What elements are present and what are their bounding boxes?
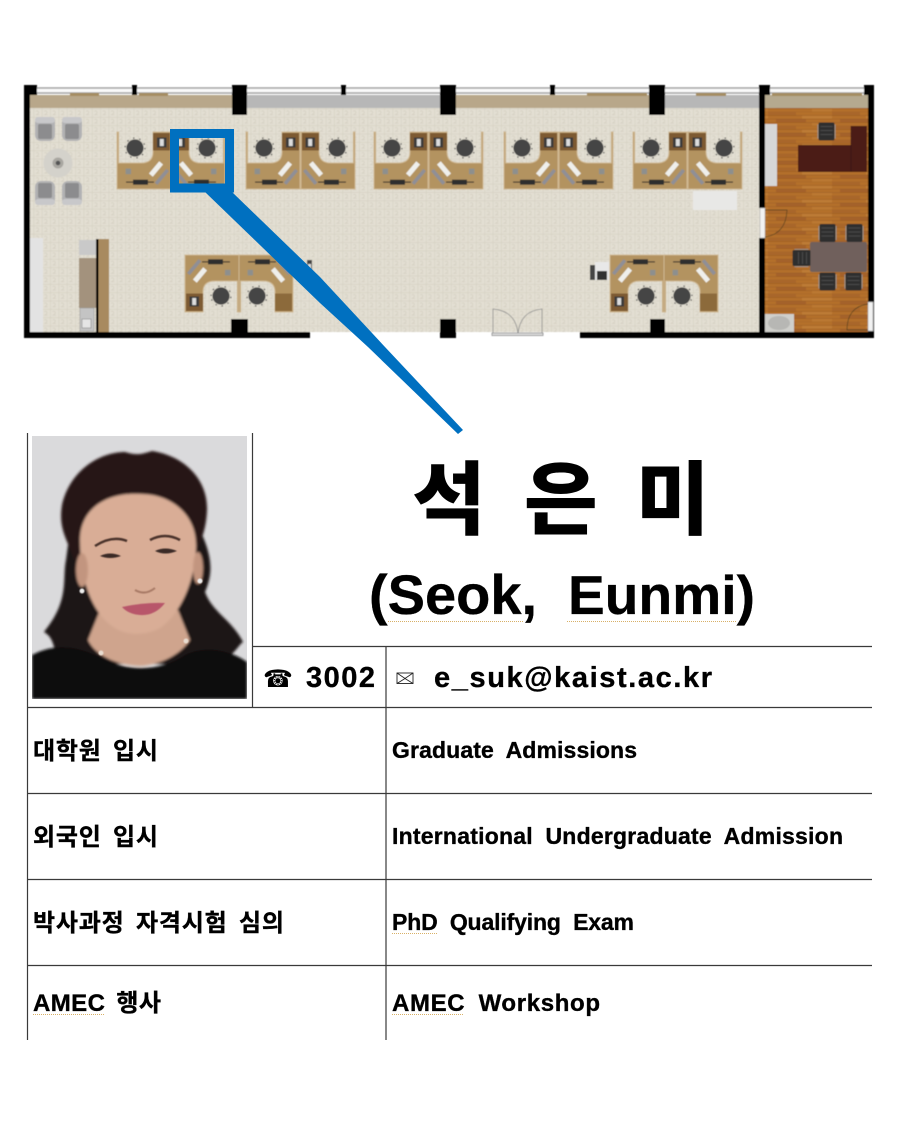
phone number: ☎ <box>263 665 293 693</box>
printer left <box>297 260 312 274</box>
workstation cluster 1 <box>117 132 225 189</box>
blue pointer arrow <box>205 192 463 434</box>
name in Korean: 은 <box>524 456 598 545</box>
window rail <box>30 88 870 93</box>
office furniture <box>765 122 867 332</box>
icon: envelope <box>397 673 413 684</box>
row: PhD qualifying exam <box>33 909 634 937</box>
row: AMEC workshop: AMEC Workshop <box>392 990 600 1017</box>
face <box>80 494 196 634</box>
office wood floor <box>765 108 869 332</box>
row: PhD qualifying exam: 박사과정 자격시험 심의 <box>33 910 284 937</box>
top <box>32 647 247 699</box>
office door frame <box>760 208 765 238</box>
workstation cluster 3 <box>374 132 483 189</box>
workstation cluster 2 <box>246 132 355 189</box>
lower workstation cluster right <box>610 255 718 312</box>
name in Korean: 미 <box>636 456 710 545</box>
name in English: (Seok, <box>369 563 537 626</box>
name in English <box>369 563 755 626</box>
entrance double door <box>492 309 543 336</box>
workstation cluster 5 <box>633 132 742 189</box>
printer right <box>590 262 609 280</box>
ears <box>76 553 88 587</box>
lounge set <box>35 117 82 205</box>
row: international admission: 외국인 입시 <box>33 824 158 851</box>
blue highlight box <box>174 134 230 188</box>
email: e_suk@kaist.ac.kr <box>434 662 712 694</box>
workstation cluster 4 <box>504 132 613 189</box>
row: international admission <box>33 823 843 851</box>
pantry <box>30 238 109 332</box>
door swing arcs <box>765 210 868 330</box>
row: graduate admissions: 대학원 입시 <box>33 738 158 765</box>
row: international admission: International Undergraduate Admission <box>392 823 843 849</box>
upper hair <box>61 451 207 560</box>
neck <box>88 610 190 666</box>
wall strips <box>30 93 868 108</box>
floor plan <box>24 85 874 338</box>
white side table <box>693 191 737 210</box>
exterior door frame <box>868 302 873 331</box>
name in Korean: 석 <box>412 456 486 545</box>
profile table lines <box>27 433 872 1040</box>
lower workstation cluster left <box>185 255 293 312</box>
eyes and brows <box>80 536 202 656</box>
row: PhD qualifying exam: PhD Qualifying Exam <box>392 909 634 935</box>
phone number: 3002 <box>306 662 375 694</box>
lower curly hair <box>44 530 243 664</box>
name in English: Eunmi) <box>568 564 755 626</box>
phone number <box>263 662 375 694</box>
open office floor <box>30 108 760 332</box>
row: AMEC workshop: AMEC 행사 <box>33 990 161 1017</box>
row: graduate admissions: Graduate Admissions <box>392 737 637 763</box>
walls and pillars <box>24 85 874 338</box>
row: AMEC workshop <box>33 990 600 1017</box>
row: graduate admissions <box>33 737 637 765</box>
portrait photo <box>32 436 247 699</box>
